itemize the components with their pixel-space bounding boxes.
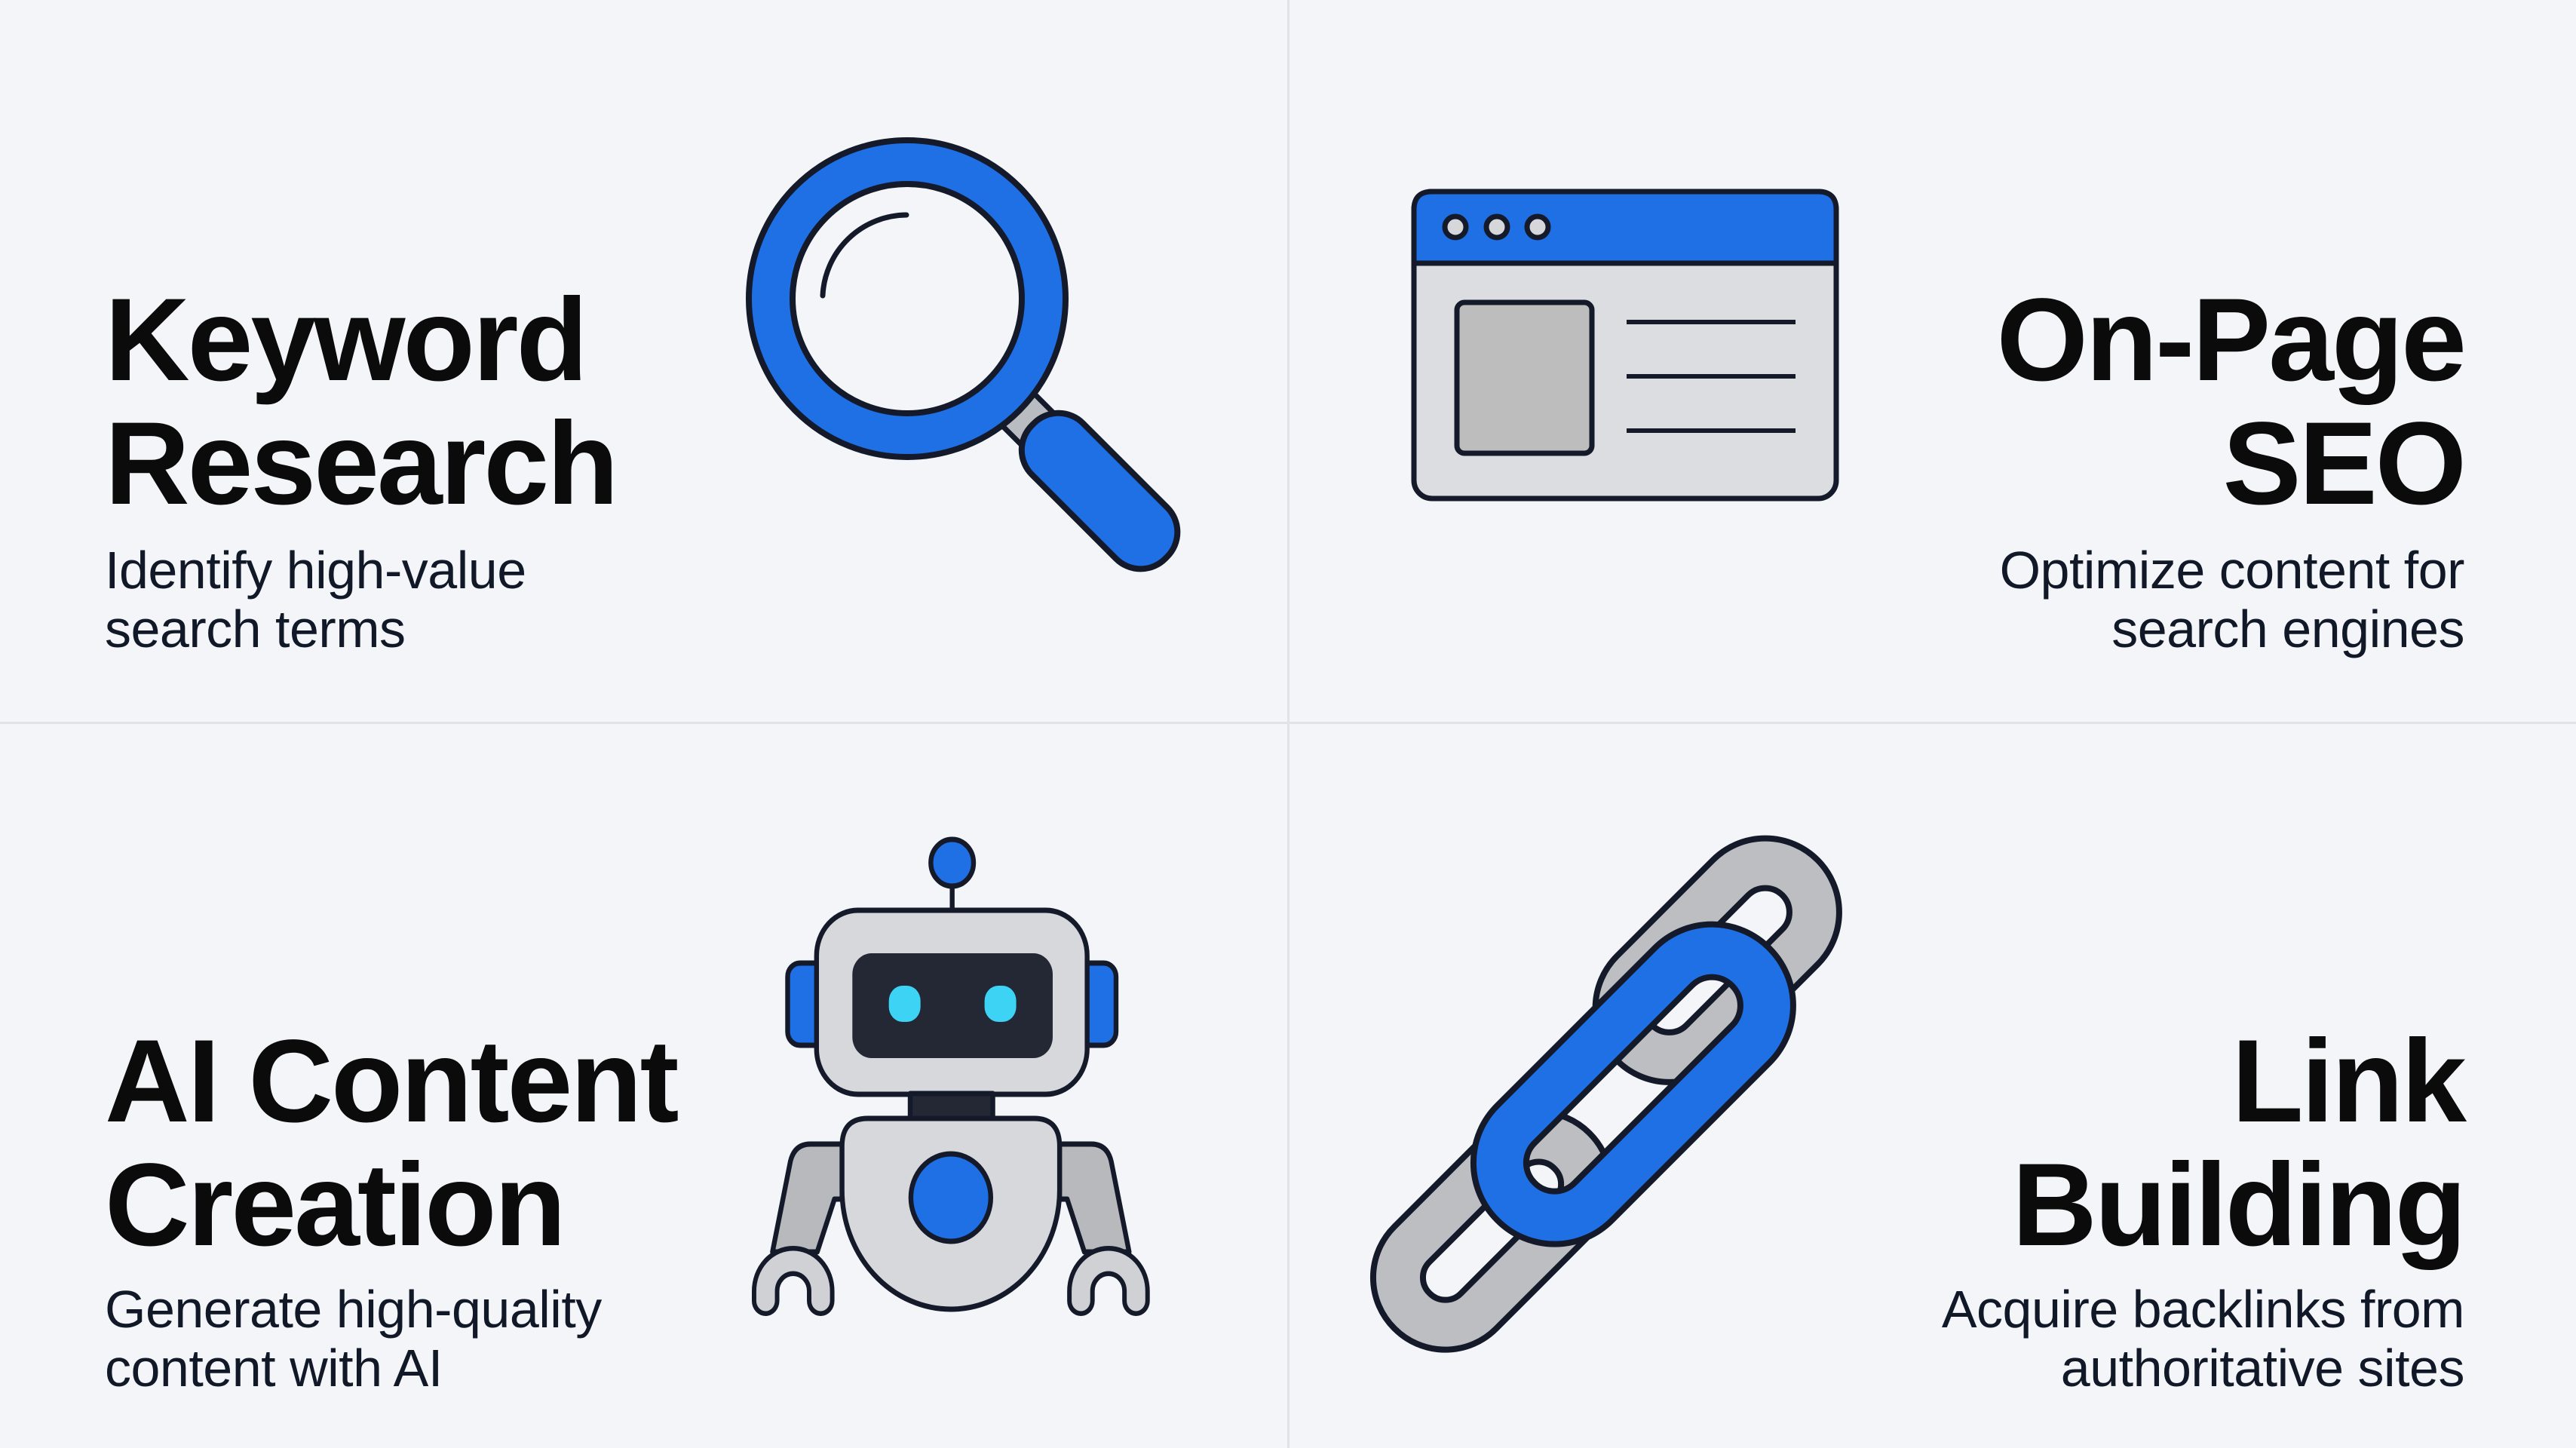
heading: link building [2012, 1016, 2467, 1271]
text: on-page description [2000, 541, 2464, 658]
text: ai description [105, 1280, 602, 1397]
icon: magnifying glass [771, 162, 1191, 583]
heading: ai content creation [105, 1016, 678, 1271]
heading: keyword research: Keyword [105, 275, 586, 406]
text: keyword description: search terms [105, 600, 406, 658]
heading: ai content creation: Creation [105, 1140, 564, 1271]
text: link description [1942, 1280, 2464, 1397]
heading: keyword research [105, 275, 616, 529]
text: ai description: content with AI [105, 1339, 443, 1397]
panel: on-page seo [1997, 275, 2464, 658]
heading: link building: Building [2012, 1140, 2464, 1271]
icon: chain link [1354, 843, 1859, 1347]
text: link description: authoritative sites [2061, 1339, 2464, 1397]
heading: on-page seo: On-Page [1997, 275, 2464, 406]
panel: link building [1942, 1016, 2467, 1397]
text: keyword description [105, 541, 526, 658]
heading: link building: Link [2231, 1016, 2464, 1147]
text: ai description: Generate high-quality [105, 1280, 602, 1339]
text: link description: Acquire backlinks from [1942, 1280, 2464, 1339]
heading: on-page seo: SEO [2223, 398, 2464, 529]
text: on-page description: search engines [2111, 600, 2464, 658]
heading: keyword research: Research [105, 398, 616, 529]
panel: keyword research [105, 275, 616, 658]
icon: robot [765, 839, 1136, 1309]
heading: ai content creation: AI Content [105, 1016, 677, 1147]
text: on-page description: Optimize content for [2000, 541, 2464, 600]
heading: on-page seo [1997, 275, 2464, 529]
panel: ai content creation [105, 1016, 678, 1397]
icon: browser window [1414, 192, 1836, 499]
text: keyword description: Identify high-value [105, 541, 526, 600]
